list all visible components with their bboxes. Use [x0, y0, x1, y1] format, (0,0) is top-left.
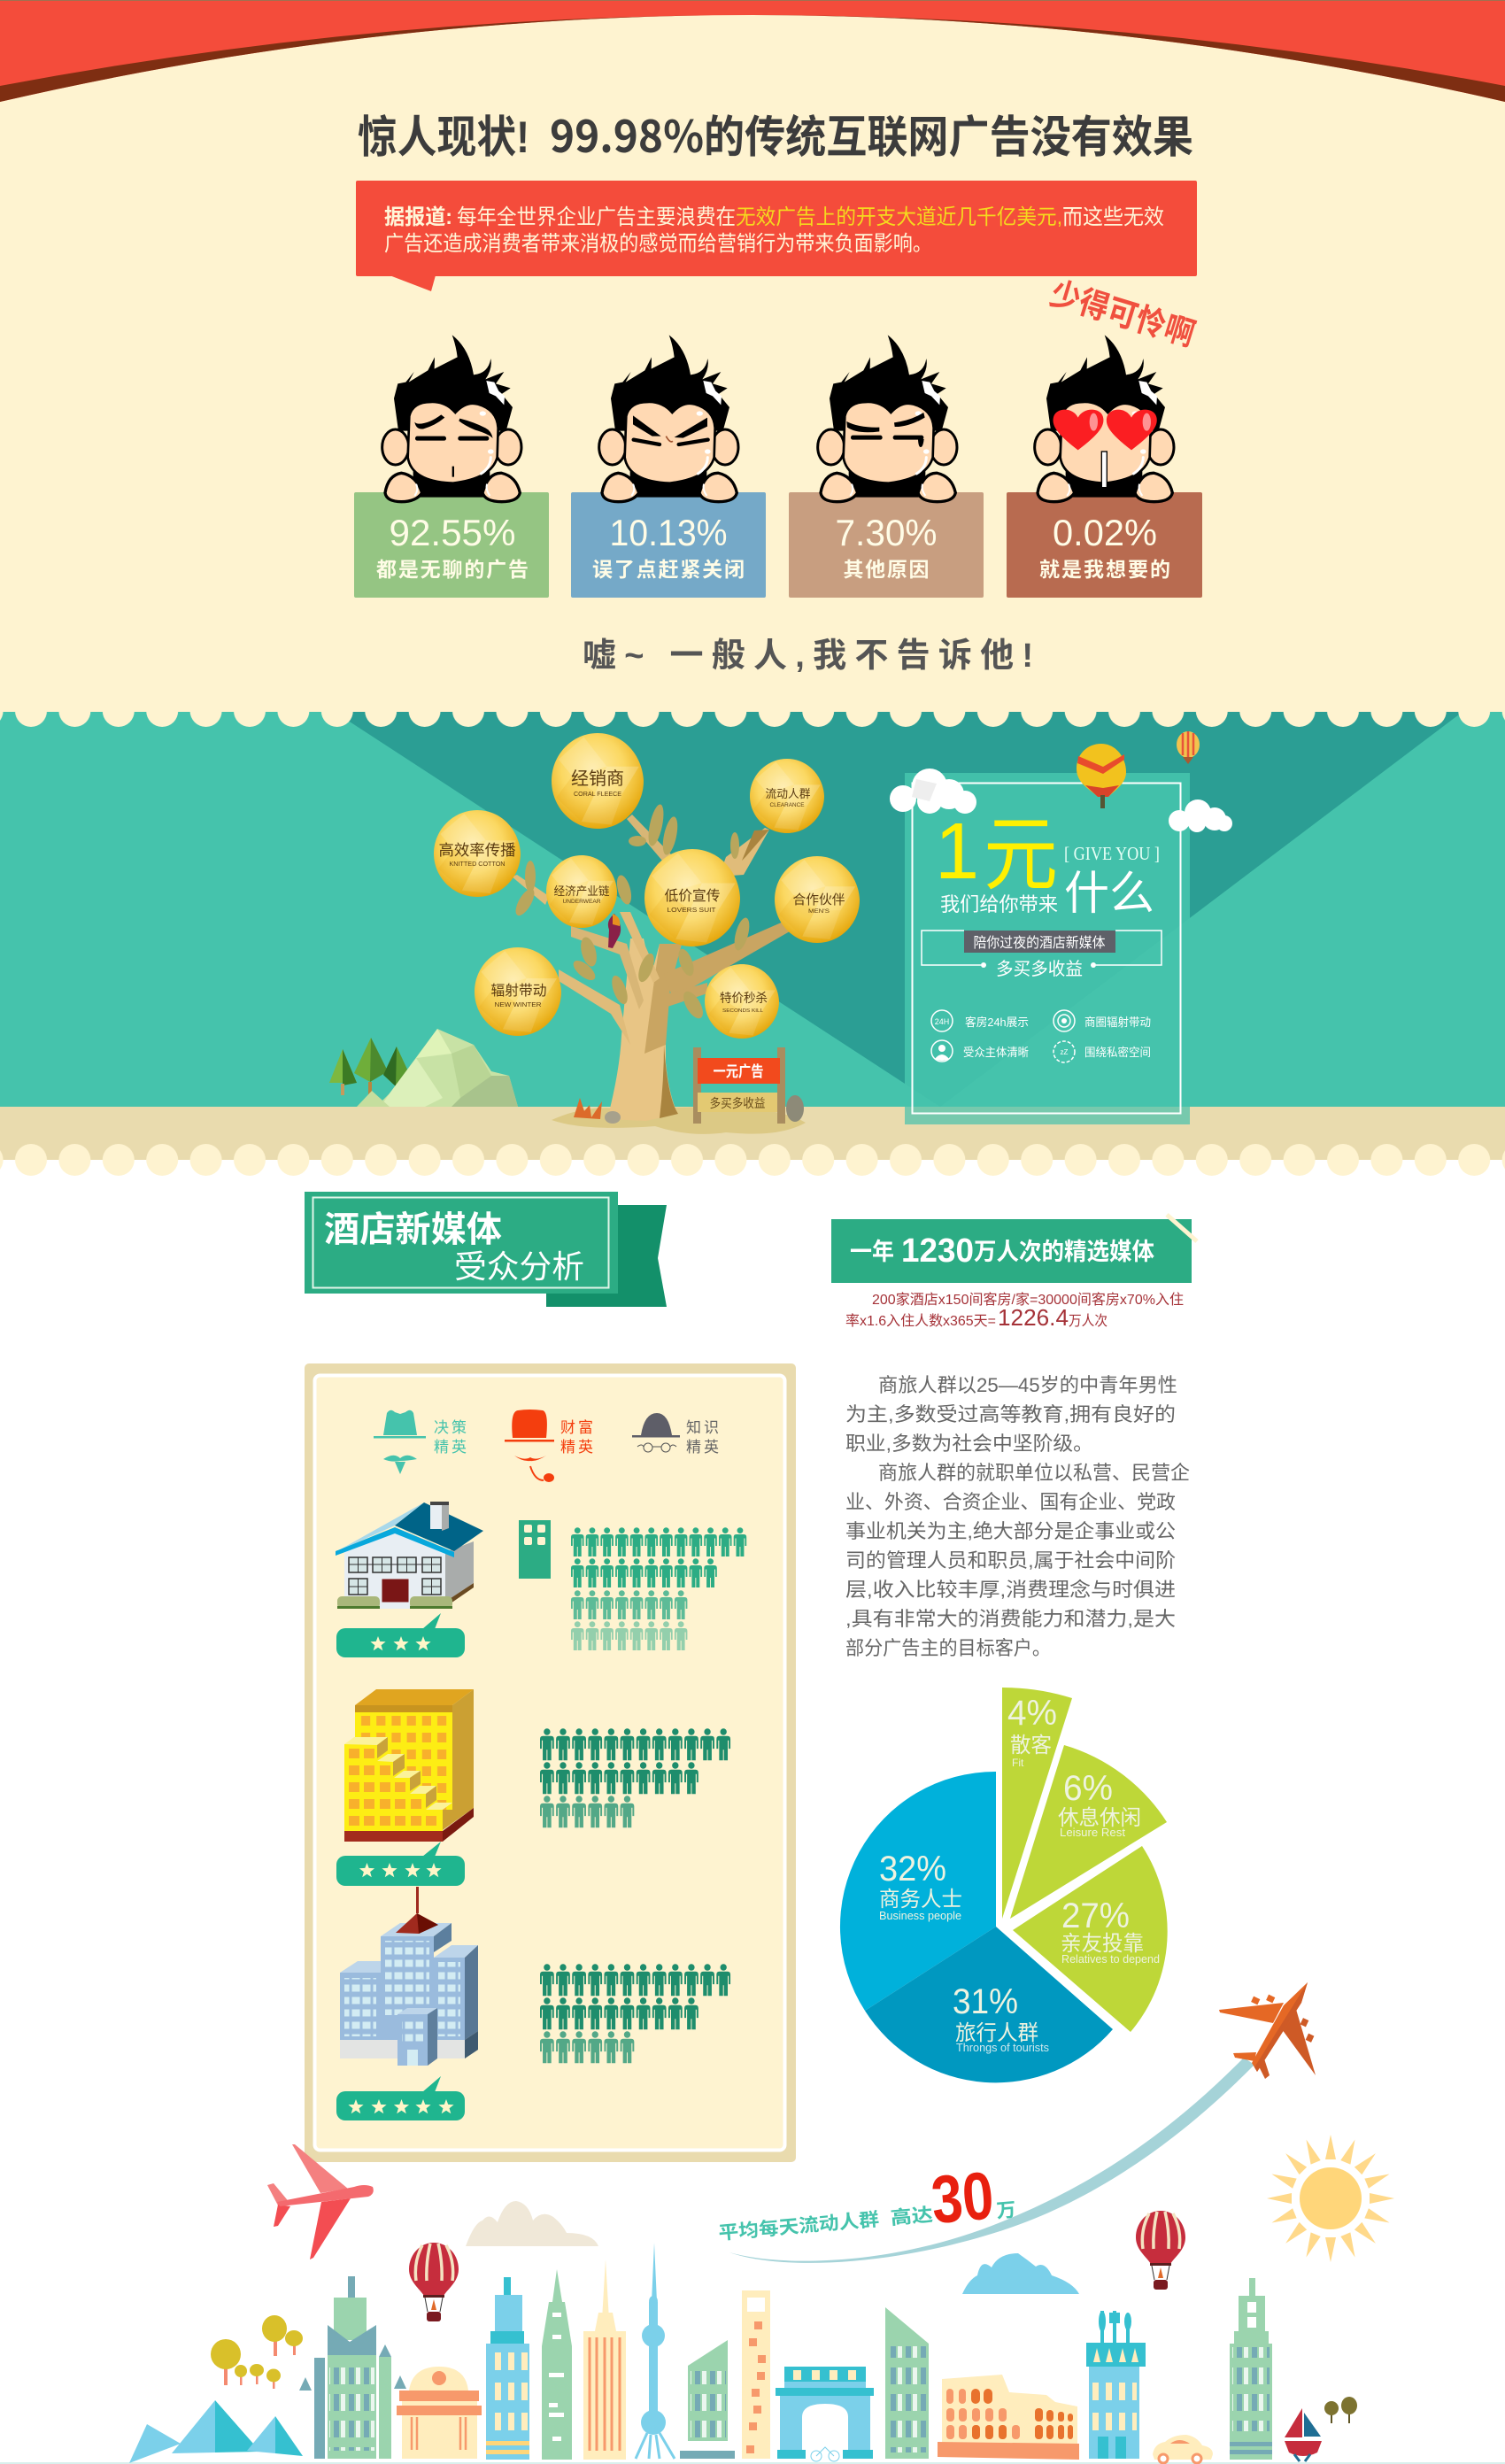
building: colosseum [938, 2375, 1079, 2460]
tree fruit bubbles [434, 733, 860, 1039]
frame: subtitle box: 多买多收益 [996, 959, 1083, 979]
icon: sceptical cartoon face [818, 335, 957, 502]
title: 99.98% [550, 102, 704, 166]
text: audience formula: 率x1.6入住人数x365天= [845, 1313, 996, 1329]
legend: wealth elite: 财富 [560, 1419, 593, 1436]
slice: 6% leisure [1010, 1745, 1167, 1919]
banner: 12.3 million selected media: 万人次的精选媒体 [974, 1239, 1154, 1265]
slice: 32% business people: Business people [879, 1909, 961, 1922]
building: green wedge [680, 2340, 735, 2459]
text: business traveller description: 事业机关为主,绝大部分是企事业或公 [845, 1520, 1176, 1542]
stat cards row [354, 492, 1202, 598]
feature: private space: 围绕私密空间 [1084, 1046, 1151, 1059]
feature: 24h display: 24H [935, 1017, 949, 1026]
bubble: low price promo [644, 849, 740, 946]
card: 92.55%: 都是无聊的广告 [376, 558, 529, 581]
text: daily flow of 300,000 people: 平均每天流动人群 [718, 2210, 880, 2244]
bubble: economy chain [546, 855, 617, 928]
card: 10.13% [571, 492, 766, 598]
icon: blue five-star hotel [340, 1887, 478, 2066]
bubble: economy chain: 经济产业链 [554, 884, 609, 898]
legend: decision makers: 精英 [434, 1439, 467, 1456]
badge: hotel new media audience analysis: 酒店新媒体 [324, 1210, 502, 1249]
text: business traveller description: 业、外资、合资企业、国有企业、党政 [845, 1491, 1176, 1513]
slice: 32% business people: 商务人士 [879, 1888, 962, 1912]
bubble: distributors: CORAL FLEECE [574, 792, 621, 798]
card: 10.13%: 10.13% [609, 512, 728, 553]
icon: left cloud [890, 769, 976, 814]
building: arch gate [776, 2367, 874, 2461]
annotation: so pitifully few: 少得可怜啊 [1046, 274, 1199, 353]
bubble: partners [775, 856, 860, 943]
callout: report speech bubble [356, 181, 1197, 291]
text: audience formula [845, 1292, 1184, 1331]
icon: large hot air balloon [1077, 744, 1126, 808]
icon: bored cartoon face [382, 335, 521, 502]
card: 92.55% [354, 492, 549, 598]
text: what we bring you: 我们给你带来 [940, 893, 1058, 915]
banner: 12.3 million selected media: 1230 [901, 1232, 974, 1270]
icon: right cloud [1169, 799, 1232, 832]
mountains [129, 2400, 303, 2463]
slice: 27% relatives: 27% [1061, 1896, 1130, 1935]
slice: 31% tourists: Throngs of tourists [956, 2041, 1049, 2054]
building: right green tower [1230, 2278, 1272, 2460]
building: cream striped tower [583, 2259, 626, 2460]
illustration: city skyline [0, 2243, 1505, 2464]
bubble: partners: MEN'S [808, 908, 830, 915]
badge: four stars [336, 1842, 465, 1886]
bubble: distributors [552, 733, 644, 829]
building: blue restaurant tower [1086, 2311, 1146, 2459]
tower: pearl TV tower [636, 2243, 675, 2459]
icon: red balloon left [409, 2243, 459, 2321]
slice: 6% leisure: 6% [1063, 1769, 1113, 1808]
slice: 31% tourists: 31% [953, 1982, 1018, 2021]
text: daily flow of 300,000 people [714, 2156, 1018, 2257]
bubble: mobile crowd: CLEARANCE [770, 803, 804, 808]
bubble: efficient spread [434, 810, 521, 897]
pictogram: four-star guests [540, 1728, 730, 1827]
building: tall cream tower [742, 2290, 770, 2459]
heading: one yuan: 1 [935, 807, 979, 896]
card: 7.30% [789, 492, 984, 598]
slice: 6% leisure: Leisure Rest [1060, 1826, 1125, 1839]
slice: 4% FIT: 4% [1007, 1694, 1057, 1733]
bubble: special offer: 特价秒杀 [720, 991, 768, 1005]
slice: 32% business people: 32% [879, 1850, 946, 1889]
frame: subtitle box: 陪你过夜的酒店新媒体 [974, 935, 1105, 951]
bubble: economy chain: UNDERWEAR [563, 900, 601, 905]
heading: one yuan [935, 789, 1058, 907]
bubble: mobile crowd: 流动人群 [765, 787, 811, 800]
bubble: low price promo: LOVERS SUIT [668, 908, 716, 914]
feature: private space [1054, 1041, 1151, 1062]
feature: 24h display [931, 1010, 1029, 1031]
icon: red balloon right [1136, 2211, 1185, 2290]
panel: teal tree section background [0, 712, 1505, 1160]
card: 7.30%: 7.30% [836, 512, 937, 553]
decoration: scallop rows [0, 711, 1505, 1176]
text: business traveller description: 商旅人群的就职单位以私营、民营企 [878, 1462, 1190, 1484]
badge: hotel new media audience analysis: 受众分析 [454, 1248, 584, 1285]
feature: private space: zZ [1061, 1048, 1069, 1056]
text: business traveller description: 层,收入比较丰厚,消费理念与时俱进 [845, 1579, 1176, 1601]
vehicle: cream car [1153, 2435, 1213, 2463]
sign: one yuan ad: 一元广告 [714, 1063, 763, 1080]
callout: report speech bubble: 据报道: [384, 205, 452, 229]
bubble: low price promo: 低价宣传 [664, 888, 721, 904]
bubble: distributors: 经销商 [571, 769, 624, 789]
badge: five stars [336, 2076, 465, 2120]
legend: wealth elite: 精英 [560, 1439, 593, 1456]
text: business traveller description: ,具有非常大的消费能力和潜力,是大 [845, 1608, 1176, 1630]
text: business traveller description: 商旅人群以25—45岁的中青年男性 [878, 1374, 1177, 1396]
panel: red curved header [0, 0, 1505, 102]
panel: top section background [0, 0, 1505, 712]
title [358, 102, 1193, 166]
decoration: grass and rocks at tree base [574, 1095, 804, 1124]
text: business traveller description: 部分广告主的目标客户。 [845, 1637, 1051, 1659]
title: 的传统互联网广告没有效果 [704, 112, 1193, 162]
slice: 6% leisure: 休息休闲 [1058, 1806, 1141, 1830]
panel: audience card [305, 1363, 796, 2162]
bubble: partners: 合作伙伴 [793, 892, 845, 908]
building: green slant tower [885, 2307, 929, 2459]
bubble: mobile crowd [750, 759, 824, 833]
icon: yellow four-star hotel [344, 1689, 474, 1842]
feature: 24h display: 客房24h展示 [965, 1016, 1029, 1029]
text: business traveller description [845, 1374, 1190, 1659]
text: business traveller description: 职业,多数为社会中坚阶级。 [845, 1433, 1093, 1455]
text: audience formula: 200家酒店x150间客房/家=30000间客房x70%入住 [872, 1292, 1184, 1308]
icon: small hot air balloon [1177, 731, 1200, 764]
bubble: efficient spread: 高效率传播 [439, 842, 515, 859]
building: green tower with teal crown [299, 2276, 406, 2459]
icon: angry cartoon face [599, 335, 738, 502]
yellow trees [211, 2315, 303, 2389]
text: daily flow of 300,000 people: 30 [929, 2158, 997, 2238]
heading: one yuan: 元 [984, 789, 1058, 907]
slice: 27% relatives: Relatives to depend [1061, 1952, 1160, 1966]
bubble: radiation: NEW WINTER [494, 1002, 542, 1008]
text: business traveller description: 司的管理人员和职员,属于社会中间阶 [845, 1549, 1176, 1572]
text: audience formula: 1226.4 [998, 1304, 1069, 1331]
building: domed hall [397, 2367, 482, 2459]
icon: orange plane [1219, 1982, 1316, 2079]
illustration: low-poly mountain and trees [329, 1029, 518, 1107]
bubble: special offer: SECONDS KILL [722, 1008, 764, 1014]
icon: red plane [267, 2144, 374, 2259]
callout: report speech bubble: 广告还造成消费者带来消极的感觉而给营销行为带来负面影响。 [384, 232, 932, 256]
icon: blue cloud [962, 2253, 1079, 2294]
building: stepped green skyscraper [542, 2269, 572, 2460]
label: give you: [ GIVE YOU ] [1064, 843, 1160, 864]
sign: buy more earn more: 多买多收益 [710, 1096, 765, 1110]
signpost [693, 1047, 785, 1124]
bubble: special offer [705, 964, 779, 1039]
illustration: tree with branches [512, 803, 806, 1134]
badge: three stars [336, 1613, 465, 1657]
slice: 32% business people [840, 1772, 996, 2011]
bubble: radiation [475, 947, 561, 1036]
feature: clear audience: 受众主体清晰 [963, 1046, 1029, 1059]
feature: clear audience [931, 1040, 1029, 1062]
card: 0.02%: 就是我想要的 [1039, 558, 1170, 581]
badge: hotel new media audience analysis [305, 1192, 667, 1307]
icon: green building [519, 1520, 551, 1579]
title: 惊人现状! [358, 112, 529, 162]
icon: sun [1267, 2135, 1394, 2262]
legend: wealth elite [505, 1410, 593, 1482]
small olive trees [1324, 2397, 1357, 2423]
text: business traveller description: 为主,多数受过高等教育,拥有良好的 [845, 1403, 1176, 1425]
icon: beige cloud [466, 2201, 598, 2246]
card: 10.13%: 误了点赶紧关闭 [592, 558, 745, 581]
legend: knowledge elite: 精英 [686, 1439, 719, 1456]
legend: knowledge elite: 知识 [686, 1419, 719, 1436]
card: 0.02%: 0.02% [1053, 512, 1157, 553]
slice: 31% tourists [865, 1927, 1113, 2082]
text: daily flow of 300,000 people: 万 [996, 2198, 1017, 2222]
text: audience formula: 万人次 [1069, 1313, 1108, 1329]
heading: whisper tagline: 嘘~ 一般人,我不告诉他! [583, 637, 1033, 675]
bubble: radiation: 辐射带动 [490, 983, 547, 999]
pictogram: five-star guests [540, 1964, 730, 2063]
legend: decision makers [374, 1410, 467, 1474]
icon: three-star house [336, 1502, 483, 1609]
callout: report speech bubble: 每年全世界企业广告主要浪费在 [457, 205, 736, 229]
banner: 12.3 million selected media [831, 1215, 1197, 1283]
frame: subtitle box [922, 931, 1162, 979]
feature: business circle [1054, 1010, 1151, 1031]
heading: what: 什么 [1064, 869, 1154, 920]
vehicle: sailboat [1285, 2408, 1322, 2461]
bubble: efficient spread: KNITTED COTTON [450, 861, 505, 868]
legend: knowledge elite [632, 1413, 719, 1456]
banner: 12.3 million selected media: 一年 [850, 1239, 894, 1265]
pictogram: three-star guests [571, 1527, 746, 1650]
slice: 4% FIT: Fit [1012, 1757, 1024, 1769]
slice: 4% FIT: 散客 [1010, 1734, 1052, 1757]
slice: 27% relatives [1013, 1846, 1168, 2032]
text: daily flow of 300,000 people: 高达 [890, 2204, 934, 2228]
icon: love-struck cartoon face [1035, 335, 1174, 502]
chart: audience pie [840, 1688, 1168, 2082]
callout: report speech bubble: 而这些无效 [1062, 205, 1164, 229]
card: 7.30%: 其他原因 [843, 558, 930, 581]
legend: decision makers: 决策 [434, 1419, 467, 1436]
card: 0.02% [1007, 492, 1202, 598]
card: 92.55%: 92.55% [390, 512, 515, 553]
building: blue tower [486, 2277, 529, 2460]
callout: report speech bubble: 无效广告上的开支大道近几千亿美元, [736, 205, 1062, 229]
slice: 31% tourists: 旅行人群 [955, 2021, 1038, 2045]
slice: 27% relatives: 亲友投靠 [1061, 1932, 1144, 1956]
feature: business circle: 商圈辐射带动 [1084, 1016, 1151, 1029]
arrow: flight path swoosh [729, 2058, 1254, 2263]
slice: 4% FIT [1002, 1688, 1072, 1919]
panel: one yuan offer [905, 773, 1190, 1124]
